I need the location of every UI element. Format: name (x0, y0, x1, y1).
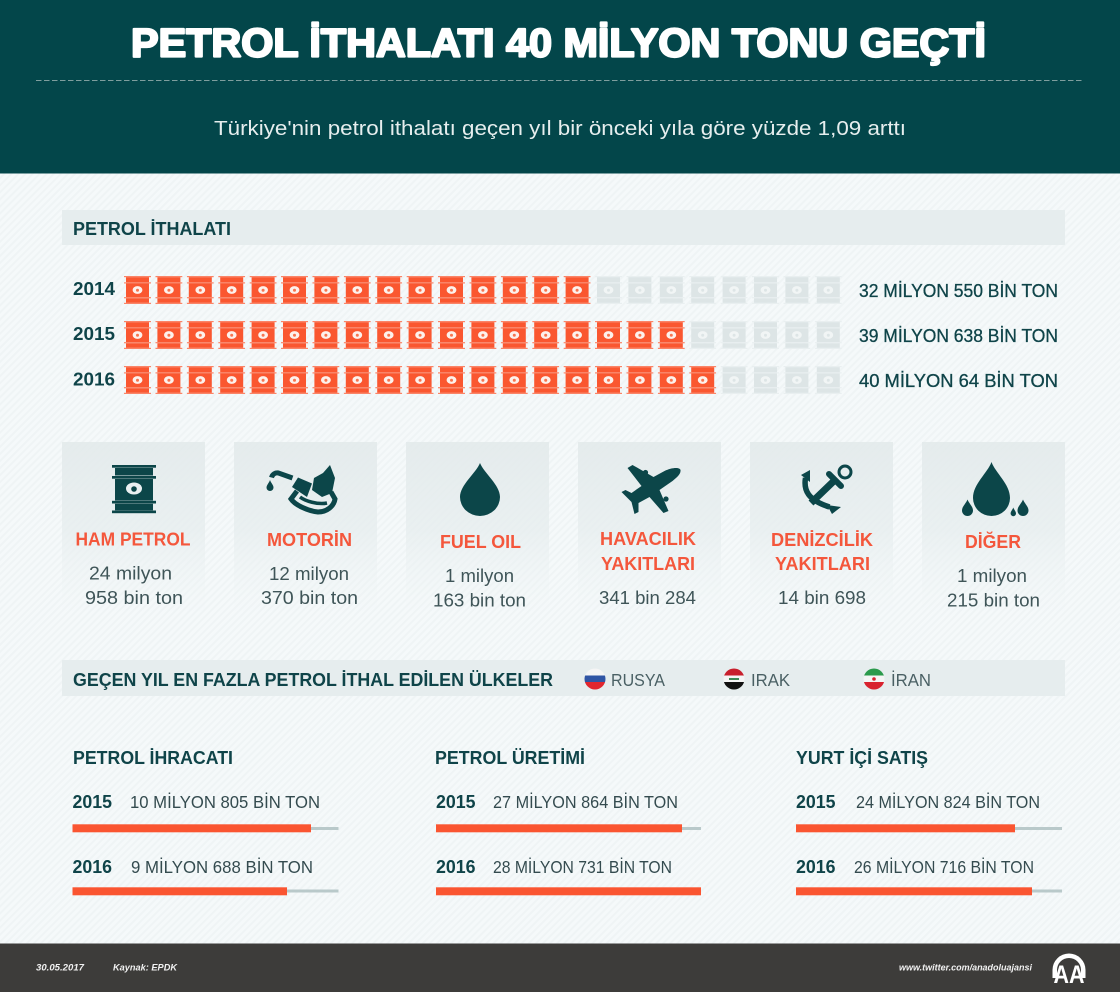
bar: üretim 2015 (436, 824, 701, 832)
panel: denizcilik yakıtları (750, 442, 893, 617)
column: petrol üretimi: PETROL ÜRETİMİ (435, 748, 585, 768)
panel: havacılık yakıtları: 341 bin 284 (599, 588, 696, 608)
barrel chart: 2015: 2015 (73, 324, 115, 344)
column: petrol üretimi: 28 MİLYON 731 BİN TON (493, 857, 672, 877)
panel: denizcilik yakıtları: DENİZCİLİK (771, 530, 873, 550)
footer: www.twitter.com/anadoluajansi (899, 962, 1032, 974)
bar: ihracat 2015 (72, 824, 338, 832)
column: yurt içi satış (796, 748, 1062, 895)
panel: motorin: MOTORİN (267, 530, 352, 550)
panel: diğer: 1 milyon (957, 566, 1027, 586)
panel: en fazla petrol ithal edilen ülkeler (62, 660, 1065, 696)
column: petrol ihracatı: 9 MİLYON 688 BİN TON (131, 857, 313, 877)
panel: en fazla petrol ithal edilen ülkeler: IRAK (751, 670, 790, 690)
panel: havacılık yakıtları: HAVACILIK (600, 529, 696, 549)
panel: denizcilik yakıtları: YAKITLARI (775, 554, 870, 574)
column: petrol ihracatı: 10 MİLYON 805 BİN TON (130, 792, 320, 812)
column: petrol üretimi (435, 748, 701, 895)
bar: satış 2016 (796, 887, 1062, 895)
panel: diğer (922, 442, 1065, 617)
panel: ham petrol: 24 milyon (89, 564, 172, 584)
title: PETROL İTHALATI 40 MİLYON TONU GEÇTİ (131, 22, 986, 66)
panel: motorin: 12 milyon (269, 564, 349, 584)
icon: drops (962, 462, 1028, 516)
panel: motorin: 370 bin ton (261, 588, 358, 608)
panel: fuel oil: 163 bin ton (433, 590, 526, 610)
panel: en fazla petrol ithal edilen ülkeler: RUSYA (611, 670, 665, 690)
bar: satış 2015 (796, 824, 1062, 832)
barrel chart: 2014 (73, 276, 1058, 304)
panel: fuel oil (406, 442, 549, 617)
footer (0, 944, 1120, 992)
column: petrol üretimi: 2016 (436, 857, 476, 877)
panel: ham petrol: 958 bin ton (85, 588, 183, 608)
panel: diğer: 215 bin ton (947, 590, 1040, 610)
barrel chart: 2016: 2016 (73, 370, 115, 390)
panel: motorin (234, 442, 377, 617)
icon: anchor (801, 466, 851, 514)
logo: Anadolu Ajansı (1052, 954, 1086, 989)
footer: 30.05.2017 (36, 962, 85, 974)
panel: en fazla petrol ithal edilen ülkeler: İRAN (891, 670, 931, 690)
panel: ham petrol: HAM PETROL (76, 530, 190, 550)
column: petrol ihracatı: 2016 (72, 857, 112, 877)
bar: üretim 2016 (436, 887, 701, 895)
bar: ihracat 2016 (72, 887, 338, 895)
column: petrol ihracatı: 2015 (72, 792, 112, 812)
barrel chart: 2014: 2014 (73, 279, 115, 299)
column: petrol üretimi: 2015 (436, 792, 476, 812)
column: yurt içi satış: 2015 (796, 792, 836, 812)
barrel chart: 2016: 40 MİLYON 64 BİN TON (859, 371, 1058, 391)
column: yurt içi satış: 24 MİLYON 824 BİN TON (856, 792, 1040, 812)
panel: fuel oil: FUEL OIL (440, 532, 521, 552)
flag: Irak (723, 668, 745, 690)
column: petrol ihracatı: PETROL İHRACATI (73, 748, 233, 768)
panel: petrol ithalatı heading (62, 210, 1065, 245)
logo: Anadolu Ajansı: AA (1054, 961, 1084, 989)
panel: diğer: DİĞER (965, 531, 1021, 552)
panel: ham petrol (62, 442, 205, 617)
icon: fuel nozzle (266, 465, 335, 512)
icon: airplane (622, 465, 681, 514)
barrel chart: 2015: 39 MİLYON 638 BİN TON (859, 326, 1058, 346)
column: petrol ihracatı (72, 748, 338, 895)
panel: fuel oil: 1 milyon (445, 566, 514, 586)
icon: barrel (112, 465, 156, 513)
flag: İran (863, 668, 885, 690)
column: petrol üretimi: 27 MİLYON 864 BİN TON (493, 792, 678, 812)
barrel chart: 2014: 32 MİLYON 550 BİN TON (859, 281, 1058, 301)
column: yurt içi satış: YURT İÇİ SATIŞ (796, 748, 928, 768)
panel: en fazla petrol ithal edilen ülkeler: GEÇEN YIL EN FAZLA PETROL İTHAL EDİLEN ÜLKELER (73, 670, 553, 690)
column: yurt içi satış: 26 MİLYON 716 BİN TON (854, 857, 1034, 877)
barrel chart: 2016 (73, 366, 1058, 394)
subtitle: Türkiye'nin petrol ithalatı geçen yıl bir önceki yıla göre yüzde 1,09 arttı (214, 117, 906, 140)
barrel chart: 2015 (73, 321, 1058, 349)
panel: havacılık yakıtları (578, 442, 721, 617)
footer: Kaynak: EPDK (113, 962, 178, 974)
flag: Rusya (584, 668, 606, 690)
panel: havacılık yakıtları: YAKITLARI (601, 554, 695, 574)
column: yurt içi satış: 2016 (796, 857, 836, 877)
header band (0, 0, 1120, 174)
icon: oil drop (460, 463, 500, 516)
panel: petrol ithalatı heading: PETROL İTHALATI (73, 219, 231, 239)
panel: denizcilik yakıtları: 14 bin 698 (778, 588, 866, 608)
